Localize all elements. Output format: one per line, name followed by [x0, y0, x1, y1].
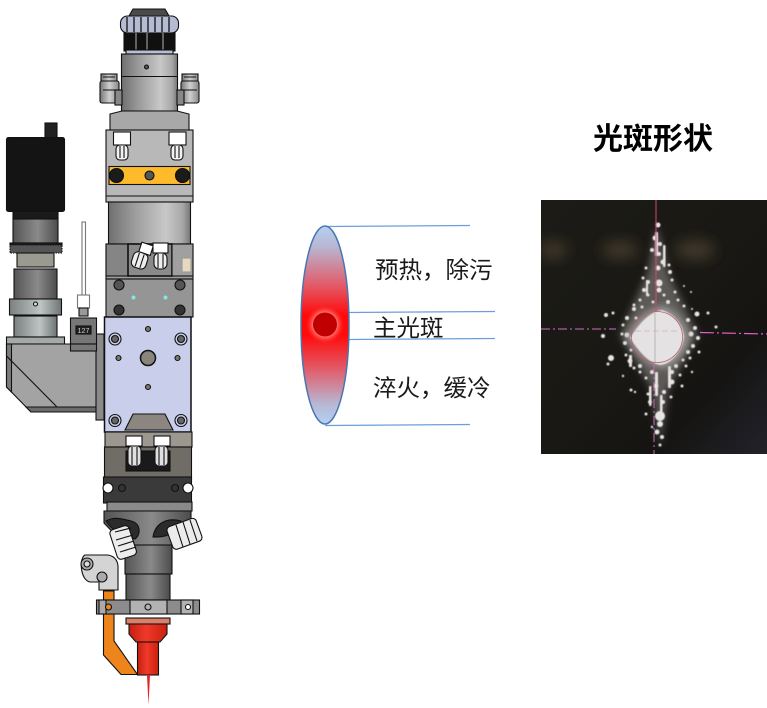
- spot shape photo: [539, 200, 767, 454]
- laser cutting head drawing: [6, 9, 203, 705]
- collar clamp: [96, 600, 200, 614]
- angled air fittings: [109, 517, 203, 560]
- central bright spot: [626, 306, 689, 368]
- crosshair: [541, 200, 767, 454]
- black clamp with bolts: [103, 477, 193, 511]
- middle cylinder: [108, 202, 190, 244]
- fitting: [169, 132, 186, 160]
- thin sensor probe: 127: [78, 328, 89, 335]
- gradient ellipse: [301, 226, 349, 424]
- lower fitting block: [104, 432, 192, 479]
- heading: 光斑形状: [593, 123, 713, 156]
- connector block: [106, 241, 193, 279]
- blue mounting plate: [104, 317, 191, 432]
- flange: [110, 111, 189, 130]
- diamond halo: [620, 225, 698, 448]
- boundary lines: [325, 226, 495, 426]
- red nozzle: [126, 618, 170, 705]
- air fitting: upper right: [177, 74, 199, 105]
- scattered laser spots: [601, 222, 718, 446]
- yellow band: [109, 166, 190, 184]
- top focus knob: [120, 9, 178, 54]
- air fitting: upper left: [100, 74, 122, 105]
- label: preheat and cleaning: 预热，除污: [375, 257, 492, 283]
- thin sensor probe: [70, 222, 96, 351]
- lower body: [104, 511, 191, 600]
- orange air tube: [104, 591, 138, 674]
- fitting: [114, 132, 130, 160]
- label: main spot: 主光斑: [373, 315, 444, 341]
- main spot: [313, 312, 337, 336]
- elbow air fitting: [81, 555, 118, 590]
- beam spot diagram: [301, 226, 495, 426]
- label: quenching and slow cooling: 淬火，缓冷: [373, 375, 490, 401]
- mount block: [106, 279, 193, 317]
- side camera module: [6, 123, 104, 420]
- clamp block with yellow band: [106, 130, 193, 202]
- fitted circle: [632, 312, 682, 362]
- upper cylinder: [122, 54, 178, 111]
- main spot glow: [305, 304, 345, 344]
